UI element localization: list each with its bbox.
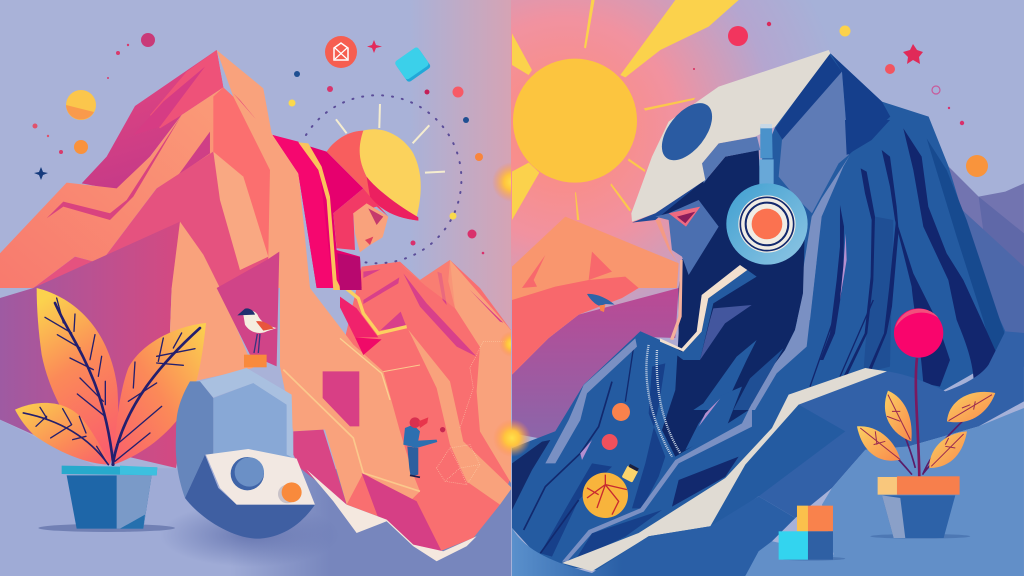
head: right figure [631,50,830,457]
mountain: right main [512,53,1005,576]
ground: left [0,420,512,576]
ground: right mid-blue slope [759,331,1024,518]
icon: stacked cubes [779,506,845,561]
figure: left helmeted woman [273,129,421,290]
rock with dials [176,368,315,539]
sun with rays [512,0,739,220]
icon: headphones [726,183,808,265]
mountain: left main peak [0,50,310,288]
panel: right background [511,0,1024,576]
decorative dots: right [693,22,988,177]
orbs: right [583,403,639,518]
icon: bird on orange block [237,308,277,367]
dotted halo [306,95,461,263]
blue cascade: right lower body [512,338,752,562]
mountain: left lower face [0,222,512,551]
helmet rays [336,104,445,173]
ribbon: left white [307,470,477,561]
icon: climber [403,341,510,485]
mountains: right distant [512,167,1024,441]
glows at the left side of the seam [492,162,532,357]
icon: cyan cube [394,46,431,83]
hair stripes [795,120,1023,393]
icon: small bird right [587,294,615,312]
panel: left background [0,0,512,576]
plant: left [15,288,206,532]
mountain: small peaks and hood folds [340,260,503,400]
collar: right figure [660,260,873,410]
decorative planets and sparkles: left [32,33,484,254]
ribbon: right [562,368,887,571]
plant: right [857,308,995,539]
icon: coral badge [325,36,357,68]
glow at the right side of the seam [493,419,531,457]
ground: right foreground [512,408,1024,576]
